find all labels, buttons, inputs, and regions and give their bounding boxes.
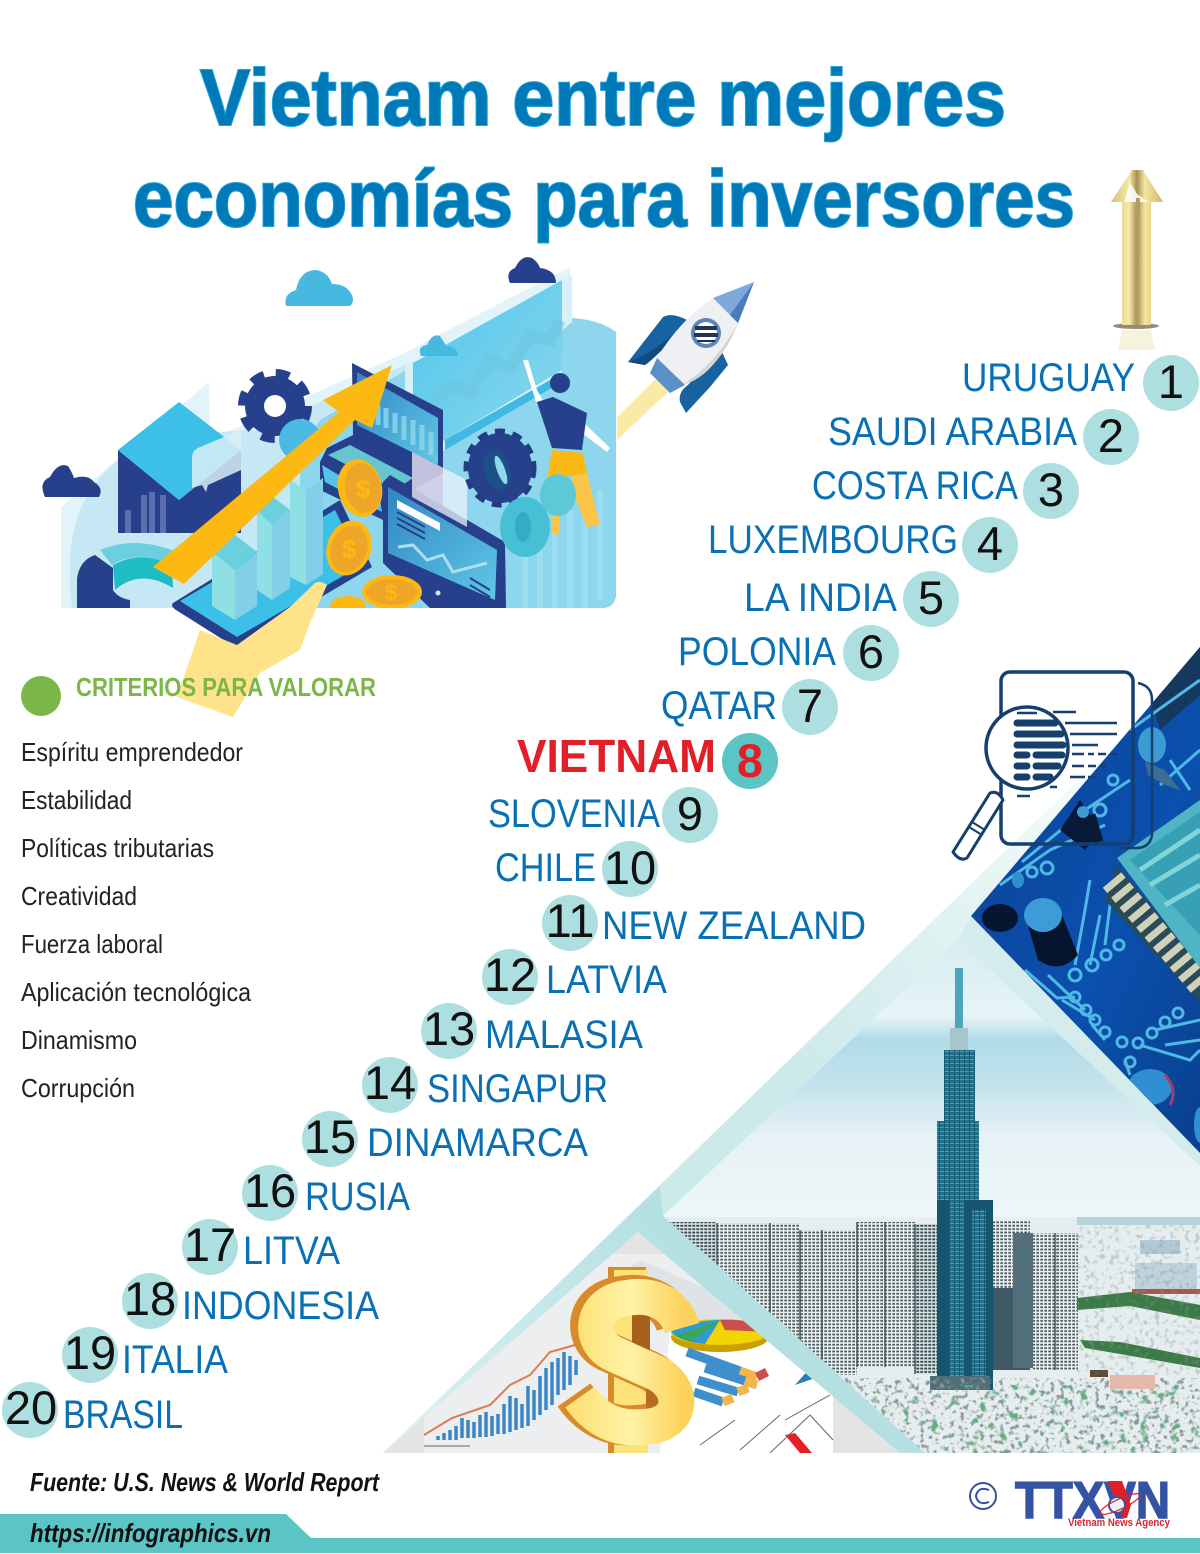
rank 18: [122, 1272, 379, 1329]
rank 1: [962, 355, 1199, 411]
bars: isometric columns on phone: [212, 478, 323, 620]
title: economías para inversores: [133, 154, 1075, 243]
coin 3 and 4: [330, 575, 422, 620]
green park strips: [1077, 1292, 1200, 1377]
rank 19: [62, 1326, 228, 1383]
rank 5: [744, 571, 959, 627]
panel: city and circuit divider stripe: [958, 916, 1200, 1168]
rank 12: [482, 948, 667, 1005]
rank 8 highlighted: VIETNAM: [517, 730, 716, 782]
icon: large navy gear: [466, 431, 534, 505]
coin 1: $: [356, 474, 371, 504]
coin 3 and 4: $: [385, 580, 397, 605]
ground speckle: [845, 1378, 1200, 1453]
rank 11: 11: [546, 894, 594, 947]
chart: red marker: [785, 1433, 812, 1453]
rank 8 highlighted: 8: [737, 734, 763, 787]
icon: hand: [177, 582, 327, 717]
icon: tablet: [383, 475, 506, 608]
text: website: https://infographics.vn: [30, 1518, 271, 1548]
rank 17: [182, 1218, 340, 1275]
rank 20: [2, 1381, 183, 1438]
rank 11: [542, 894, 866, 951]
icon: golden up arrow: [1111, 170, 1163, 350]
icon: translucent document: [412, 452, 467, 527]
chart: blue bars: [438, 1352, 576, 1440]
chart: pie: [671, 1319, 769, 1352]
rank 12: LATVIA: [546, 958, 667, 1002]
rank 16: RUSIA: [305, 1175, 410, 1219]
chart: axis detail: [424, 1395, 833, 1453]
icon: cloud navy left: [42, 465, 101, 497]
dark component strip: [1150, 645, 1200, 730]
rank 13: 13: [423, 1002, 475, 1055]
panel: wall screen: [405, 275, 572, 470]
icon: envelope: [118, 402, 241, 533]
text: criteria list: Fuerza laboral: [21, 929, 163, 959]
rank 14: SINGAPUR: [427, 1067, 608, 1111]
text: TTXVN wordmark: TTXVN: [1015, 1472, 1170, 1530]
text: criteria list: Creatividad: [21, 881, 137, 911]
illustration: investment growth: [42, 257, 754, 717]
rank 20: BRASIL: [63, 1393, 183, 1437]
text: source: Fuente: U.S. News & World Report: [30, 1467, 380, 1497]
text: criteria list: Aplicación tecnológica: [21, 977, 251, 1007]
rank 6: POLONIA: [678, 630, 836, 674]
distant city: [660, 1217, 1200, 1457]
rank 10: 10: [604, 841, 656, 894]
text: criteria list: Estabilidad: [21, 785, 132, 815]
panel: finance triangle frame: [383, 1186, 925, 1453]
rank 19: ITALIA: [122, 1338, 228, 1382]
icon: laptop: [320, 363, 443, 520]
circuit traces: [1000, 680, 1200, 1095]
rank 2: 2: [1098, 409, 1124, 462]
rank 13: MALASIA: [485, 1013, 643, 1057]
rank 1: 1: [1158, 355, 1184, 408]
icon: gold dollar sign: [574, 1267, 682, 1457]
footer band: [0, 1514, 1200, 1553]
rank 4: LUXEMBOURG: [708, 518, 958, 562]
title: [133, 53, 1075, 243]
icon: donut chart: [77, 543, 177, 608]
panel: pale diagonal band: [383, 730, 1130, 1453]
rank 15: DINAMARCA: [367, 1121, 588, 1165]
capacitors: [982, 727, 1200, 1143]
rank 18: 18: [124, 1272, 176, 1325]
rank 9: SLOVENIA: [488, 792, 660, 836]
icon: rocket: [617, 282, 754, 440]
coin 2: $: [342, 534, 357, 564]
title: Vietnam entre mejores: [200, 53, 1006, 142]
rank 10: CHILE: [495, 846, 596, 890]
text: criteria list: Dinamismo: [21, 1025, 137, 1055]
icon: cloud navy top: [508, 257, 556, 283]
rank 2: SAUDI ARABIA: [828, 410, 1077, 454]
chart: orange growth line: [424, 1345, 575, 1435]
icon: coins: [319, 455, 422, 620]
chip: [1105, 800, 1200, 1002]
icon: phone: [172, 500, 372, 646]
rank 13: [421, 1002, 643, 1059]
panel: city skyline photo: [660, 935, 1200, 1458]
chart: blue polygon corner: [795, 1373, 812, 1385]
rank 9: 9: [677, 787, 703, 840]
rank 7: [661, 679, 838, 735]
rank 17: LITVA: [243, 1229, 340, 1273]
rank 20: 20: [5, 1381, 57, 1434]
text: criteria list: Espíritu emprendedor: [21, 737, 243, 767]
rank 10: [495, 841, 658, 897]
panel: finance charts photo: [380, 1225, 910, 1455]
rank 18: INDONESIA: [182, 1284, 379, 1328]
decorative vertical stripes: [525, 490, 600, 608]
heading: criterios: [21, 672, 376, 716]
rank 7: 7: [797, 679, 823, 732]
ranking list: [2, 355, 1199, 1438]
icon: green bullet: [21, 676, 61, 716]
icon: person: [523, 360, 610, 535]
rank 4: 4: [977, 517, 1003, 570]
panel: pale illustration backdrop: [61, 267, 616, 608]
text: criteria list: Políticas tributarias: [21, 833, 214, 863]
rank 16: 16: [244, 1164, 296, 1217]
buildings: [668, 1220, 1200, 1382]
rank 6: 6: [858, 625, 884, 678]
text: criteria list: Corrupción: [21, 1073, 135, 1103]
rank 3: COSTA RICA: [812, 464, 1018, 508]
icon: cloud teal large: [285, 270, 353, 306]
rank 9: [488, 787, 718, 843]
rank 11: NEW ZEALAND: [602, 904, 866, 948]
rank 12: 12: [484, 948, 536, 1001]
icon: red V and globe: [1098, 1481, 1142, 1518]
text: Vietnam News Agency: Vietnam News Agency: [1068, 1517, 1171, 1529]
rank 8 highlighted: [517, 730, 778, 789]
rank 14: [362, 1056, 608, 1113]
panel: mid blue backdrop: [300, 318, 616, 608]
icon: teal small gear behind arrow: [279, 419, 321, 461]
landmark tower: [930, 968, 993, 1390]
rank 16: [242, 1164, 410, 1221]
icon: growth arrow: [153, 365, 392, 584]
coin 1: [332, 455, 388, 521]
text: criteria heading: CRITERIOS PARA VALORAR: [76, 672, 376, 702]
icon: teal gears: [500, 474, 576, 557]
rank 7: QATAR: [661, 684, 777, 728]
icon: cloud teal small: [420, 335, 458, 356]
rank 6: [678, 625, 899, 681]
panel: light circular backdrop: [70, 318, 616, 608]
icon: navy gear top: [242, 373, 308, 439]
rank 19: 19: [64, 1326, 116, 1379]
icon: copyright: [970, 1483, 996, 1509]
rank 3: 3: [1038, 463, 1064, 516]
icon: document with magnifier: [953, 672, 1152, 859]
rank 15: 15: [304, 1110, 356, 1163]
rank 15: [302, 1110, 588, 1167]
rank 1: URUGUAY: [962, 356, 1135, 400]
chart: stacked bars: [687, 1352, 767, 1402]
coin 2: [319, 514, 379, 582]
panel: circuit board photo: [960, 640, 1200, 1160]
rank 5: LA INDIA: [744, 576, 897, 620]
rank 14: 14: [364, 1056, 416, 1109]
rank 17: 17: [184, 1218, 236, 1271]
text: criteria list: [21, 737, 251, 1103]
rank 5: 5: [918, 571, 944, 624]
logo: TTXVN: [970, 1472, 1171, 1530]
